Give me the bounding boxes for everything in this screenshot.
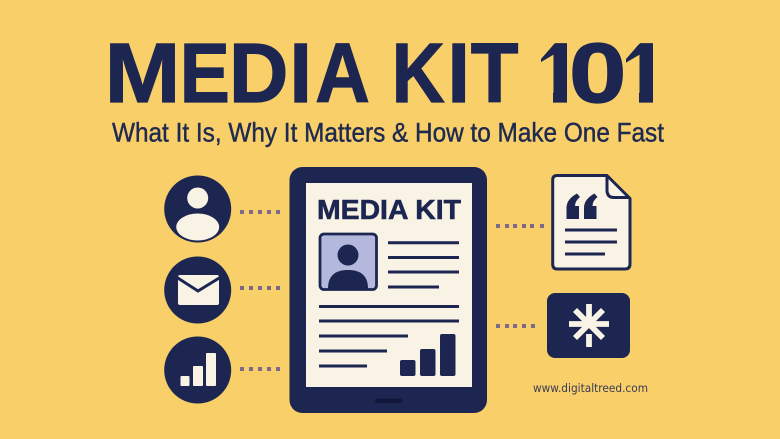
tablet screen — [306, 183, 472, 387]
icon: quote document — [553, 176, 630, 269]
profile photo — [320, 234, 376, 290]
body text lines — [319, 306, 459, 366]
title: 0 — [569, 26, 626, 120]
title: I — [290, 26, 312, 120]
tablet bar chart — [400, 334, 456, 376]
connector: person to tablet — [240, 210, 280, 214]
quote text lines — [565, 230, 617, 254]
connector: tablet to document — [496, 224, 544, 228]
connector: stats to tablet — [240, 367, 280, 371]
title — [110, 42, 653, 104]
title: D — [229, 26, 288, 120]
icon: email circle — [164, 256, 231, 324]
tablet home button — [375, 398, 402, 403]
icon: stats circle — [164, 336, 231, 404]
website url: www.digitaltreed.com — [533, 381, 648, 395]
icon: person circle — [164, 176, 231, 242]
title: 1 — [533, 26, 583, 120]
quote mark — [566, 194, 598, 219]
title: K — [392, 26, 445, 120]
title: I — [448, 26, 470, 120]
title: 1 — [619, 26, 669, 120]
tablet — [290, 167, 487, 413]
title: A — [315, 26, 370, 120]
bio text lines — [388, 243, 459, 287]
title: T — [471, 26, 518, 120]
connector: email to tablet — [240, 286, 280, 290]
tablet heading: MEDIA KIT — [317, 194, 461, 225]
title: M — [105, 26, 180, 120]
title: E — [180, 26, 230, 120]
subtitle: What It Is, Why It Matters & How to Make One Fast — [112, 118, 665, 148]
icon: asterisk badge — [547, 293, 630, 358]
connector: tablet to badge — [496, 324, 535, 328]
